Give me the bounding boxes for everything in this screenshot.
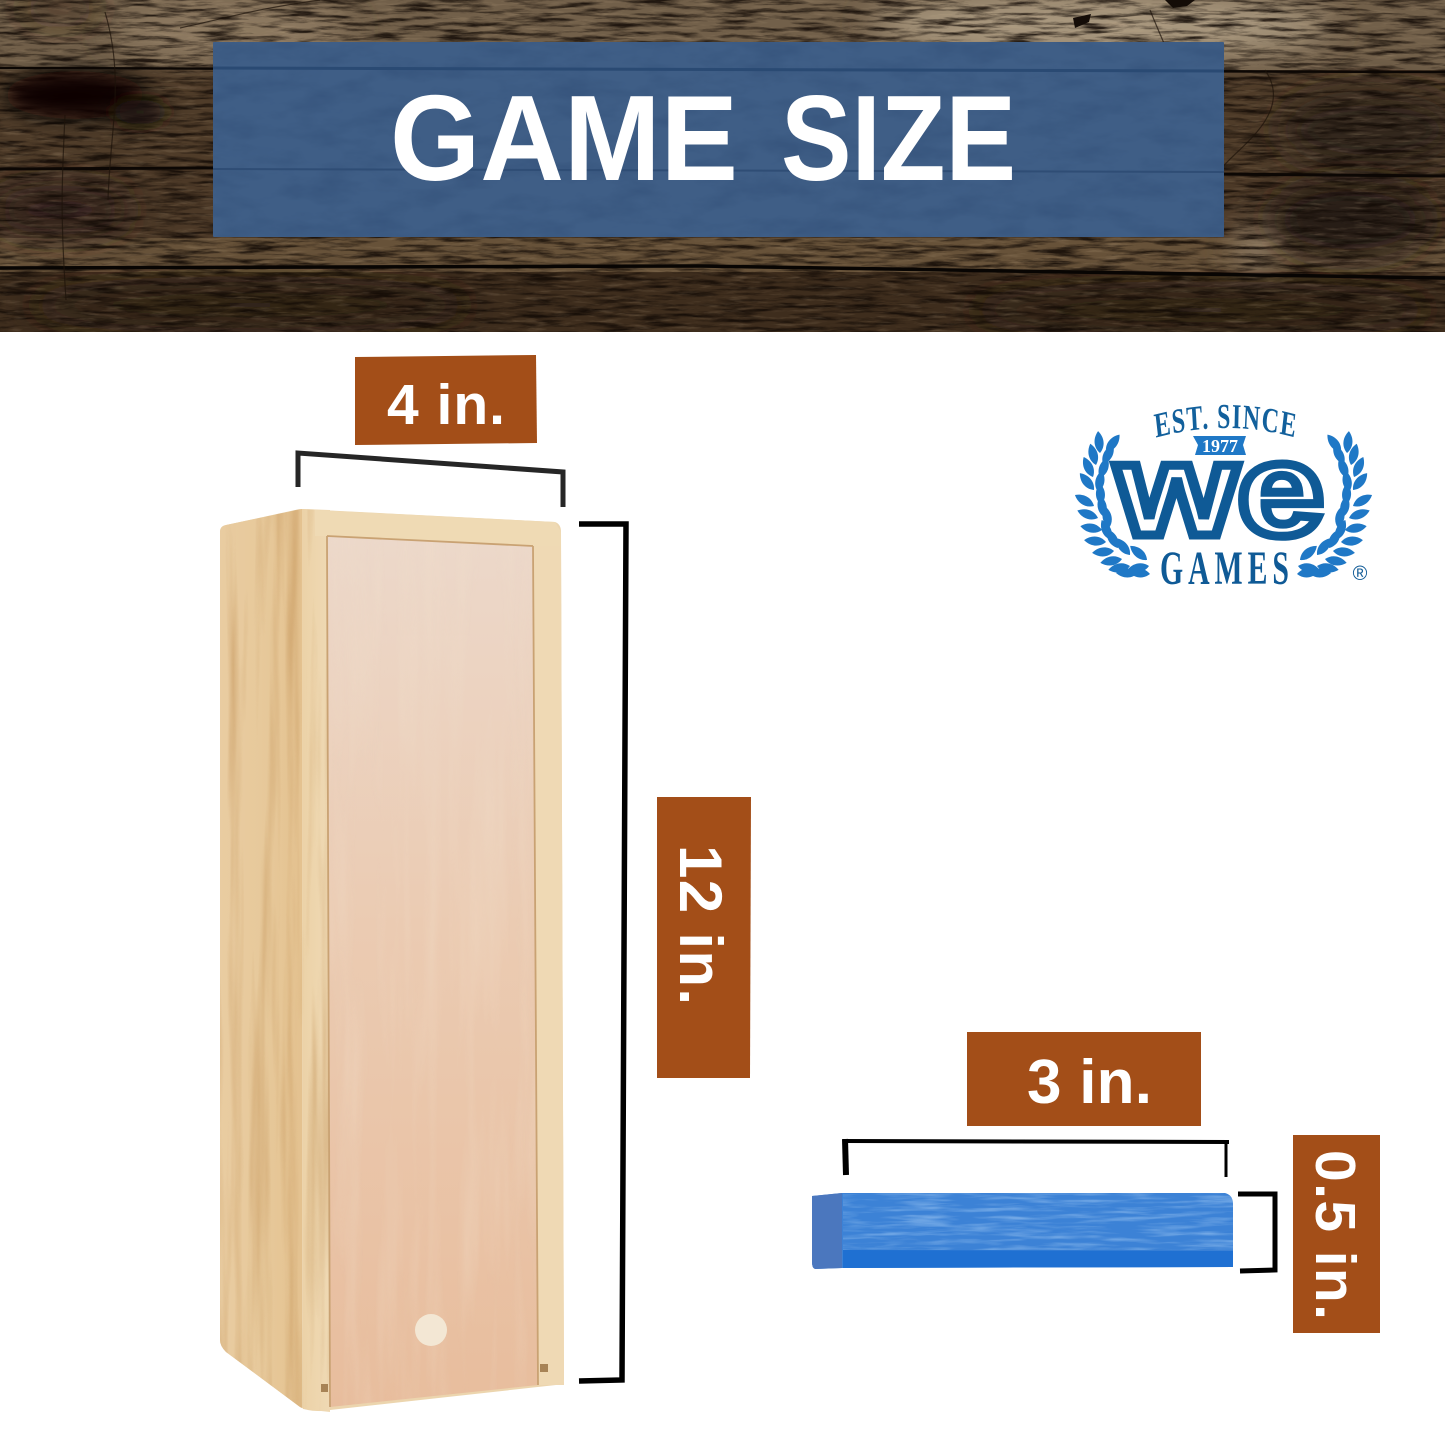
logo: right laurel [1297,431,1374,578]
box side face [220,509,302,1408]
label: 4 in. [355,355,537,445]
label: 0.5 in.: 0.5 in. [1303,1150,1367,1320]
logo: WE Games [1075,404,1372,595]
logo: we wordmark: we [1115,416,1324,563]
label: 0.5 in. [1293,1135,1380,1333]
box top rail [315,510,561,546]
blue wooden block [812,1193,1233,1269]
block end cap [812,1193,842,1269]
wooden box [220,509,564,1412]
heading: game size: SIZE [781,70,1016,206]
heading: game size: GAME [390,70,738,206]
heading: game size [390,70,1016,206]
label: 4 in.: 4 in. [387,373,505,437]
box notches [321,1364,548,1392]
box panel shadows [327,536,538,1407]
block highlight streaks [843,1193,1233,1250]
logo: registered mark: ® [1353,563,1368,585]
logo: games: GAMES [1160,541,1294,595]
box sliding lid panel [327,536,538,1407]
label: 3 in. [967,1032,1201,1126]
box wood grain [220,509,330,1412]
label: 3 in.: 3 in. [1027,1048,1152,1117]
bracket: box height [579,524,626,1381]
box front left rail [302,509,330,1412]
logo: left laurel [1073,431,1150,578]
title banner [213,42,1224,237]
box finger dot [415,1314,447,1346]
bracket: piece thickness [1238,1194,1275,1271]
bracket: box width [298,453,563,507]
header: wood plank background [0,0,1445,332]
logo: 1977 ribbon: 1977 [1202,436,1238,456]
bracket: piece length [843,1139,1229,1177]
logo: est. since: EST. SINCE [1154,404,1296,438]
label: 12 in. [657,797,751,1078]
block lower face [843,1250,1233,1268]
box right rail [533,546,564,1385]
label: 12 in.: 12 in. [667,845,734,1005]
logo: 1977 ribbon [1193,436,1246,456]
box panel grain [354,1078,536,1274]
